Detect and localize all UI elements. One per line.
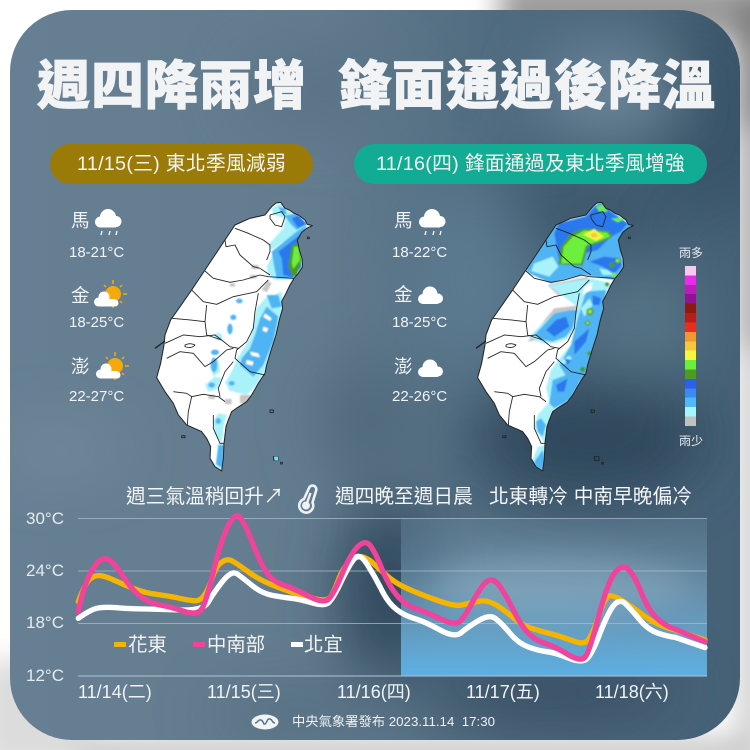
forecast highlight <box>401 519 707 676</box>
weather: Matsu 11/15: 18-21°C <box>69 244 124 261</box>
x axis date labels: 11/16(四) <box>337 682 411 702</box>
y axis labels: 24°C <box>26 561 64 580</box>
weather: Penghu 11/16: 22-26°C <box>392 388 447 405</box>
footer: publisher and time: 中央氣象署發布 2023.11.14 17:30 <box>292 714 495 729</box>
rainfall legend <box>679 246 703 448</box>
series: 中南部 <box>78 516 705 659</box>
weather: Kinmen 11/16 <box>392 284 447 331</box>
weather: Penghu 11/15: 22-27°C <box>69 388 124 405</box>
weather: Matsu 11/16: 馬 <box>394 210 413 231</box>
map: rainfall 11/15 <box>154 202 313 472</box>
x axis date labels <box>78 682 669 702</box>
weather: Kinmen 11/15: 18-25°C <box>69 314 124 331</box>
temperature line chart <box>76 513 708 677</box>
title: 週四降雨增 <box>37 44 307 120</box>
title: 鋒面通過後降溫 <box>338 44 716 120</box>
rainfall legend: 雨少 <box>679 434 703 448</box>
weather: Matsu 11/15: 馬 <box>71 210 90 231</box>
date pill: 11/16 <box>354 144 707 184</box>
title <box>36 44 716 120</box>
weather: Kinmen 11/16: 金 <box>394 284 413 305</box>
chart legend: 北宜 <box>304 634 343 656</box>
chart legend: 花東 <box>128 634 167 656</box>
weather: Kinmen 11/16: 18-25°C <box>392 314 447 331</box>
chart legend: 中南部 <box>207 634 265 656</box>
icon: agency logo <box>252 714 278 730</box>
subtitle: cooling summary: 北東轉冷 中南早晚偏冷 <box>489 486 692 508</box>
weather: Penghu 11/15: 澎 <box>71 356 90 377</box>
series: 花東 <box>78 557 705 643</box>
y axis labels <box>26 509 64 685</box>
map: rainfall 11/16 <box>476 202 634 472</box>
weather: Kinmen 11/15 <box>69 280 127 331</box>
date pill: 11/15 <box>50 144 313 184</box>
weather: Matsu 11/16 <box>392 209 447 261</box>
weather: Matsu 11/16: 18-22°C <box>392 244 447 261</box>
date pill: 11/16: 11/16(四) 鋒面通過及東北季風增強 <box>376 153 685 175</box>
rainfall legend: 雨多 <box>679 246 703 260</box>
series: 北宜 <box>78 556 705 661</box>
chart legend <box>114 634 343 656</box>
y axis labels: 30°C <box>26 509 64 528</box>
weather: Penghu 11/16: 澎 <box>394 356 413 377</box>
weather: Penghu 11/15 <box>69 352 129 405</box>
subtitle: Thursday night to Sunday morning: 週四晚至週日晨 <box>335 486 473 508</box>
date pill: 11/15: 11/15(三) 東北季風減弱 <box>77 153 286 175</box>
icon: thermometer <box>298 484 318 514</box>
weather: Matsu 11/15 <box>69 209 124 261</box>
y axis labels: 18°C <box>26 613 64 632</box>
weather: Kinmen 11/15: 金 <box>71 285 90 306</box>
subtitle: Wednesday warming: 週三氣溫稍回升↗ <box>126 486 284 508</box>
y axis labels: 12°C <box>26 666 64 685</box>
weather: Penghu 11/16 <box>392 356 447 405</box>
x axis date labels: 11/14(二) <box>78 682 152 702</box>
x axis date labels: 11/15(三) <box>207 682 281 702</box>
x axis date labels: 11/17(五) <box>466 682 540 702</box>
x axis date labels: 11/18(六) <box>595 682 669 702</box>
